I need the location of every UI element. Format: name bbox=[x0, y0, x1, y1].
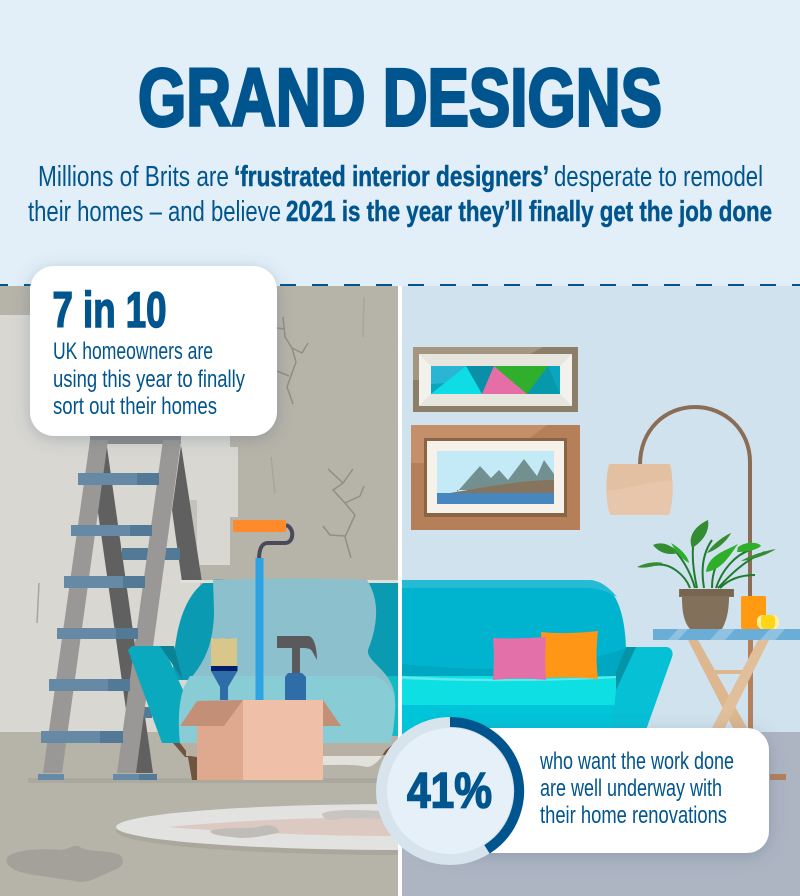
bare wall lower right bbox=[200, 565, 398, 595]
centre divider bbox=[398, 286, 402, 896]
donut chart bbox=[376, 717, 524, 865]
description bbox=[53, 338, 245, 420]
wall cracks bbox=[37, 297, 364, 623]
description: UK homeowners are bbox=[53, 338, 213, 365]
subtitle: ‘frustrated interior designers’ bbox=[234, 161, 549, 193]
floor stain bbox=[7, 846, 123, 882]
faded sofa bbox=[128, 578, 398, 780]
callout: 7 in 10 bbox=[30, 266, 277, 436]
rug bbox=[116, 804, 398, 855]
paint roller bbox=[233, 520, 292, 702]
paint brush bbox=[211, 638, 238, 700]
picture: abstract bbox=[413, 347, 578, 412]
lamp base foot bbox=[770, 774, 786, 780]
description: their home renovations bbox=[540, 802, 727, 829]
description bbox=[539, 748, 734, 829]
callout: 41% bbox=[376, 717, 769, 865]
panel: after (finished room) bbox=[402, 286, 800, 896]
potted plant bbox=[637, 520, 776, 629]
floor bbox=[402, 732, 800, 896]
plaster patch bbox=[0, 286, 238, 732]
side table bbox=[653, 629, 800, 728]
modern sofa bbox=[402, 580, 673, 735]
panel: before (unfinished room) bbox=[0, 286, 398, 896]
subtitle bbox=[28, 161, 772, 228]
statistic: 7 in 10 bbox=[52, 282, 166, 338]
hammer bbox=[277, 636, 317, 700]
cardboard box bbox=[180, 700, 341, 780]
description: using this year to finally bbox=[53, 366, 245, 393]
picture: landscape bbox=[411, 425, 580, 530]
dashed line bbox=[0, 284, 800, 286]
floor lamp bbox=[606, 407, 753, 730]
statistic: 41% bbox=[407, 762, 492, 818]
description: sort out their homes bbox=[53, 393, 217, 420]
floor bbox=[0, 732, 398, 896]
header background bbox=[0, 0, 800, 286]
painted wall bbox=[402, 286, 800, 732]
bare wall bbox=[0, 286, 398, 565]
ladder bbox=[38, 436, 202, 780]
pink cushion bbox=[493, 637, 546, 680]
description: who want the work done bbox=[539, 748, 734, 775]
candles bbox=[741, 596, 779, 629]
description: are well underway with bbox=[540, 775, 722, 802]
subtitle: their homes – and believe bbox=[28, 196, 281, 228]
orange cushion bbox=[541, 631, 598, 679]
subtitle: Millions of Brits are bbox=[38, 161, 229, 193]
